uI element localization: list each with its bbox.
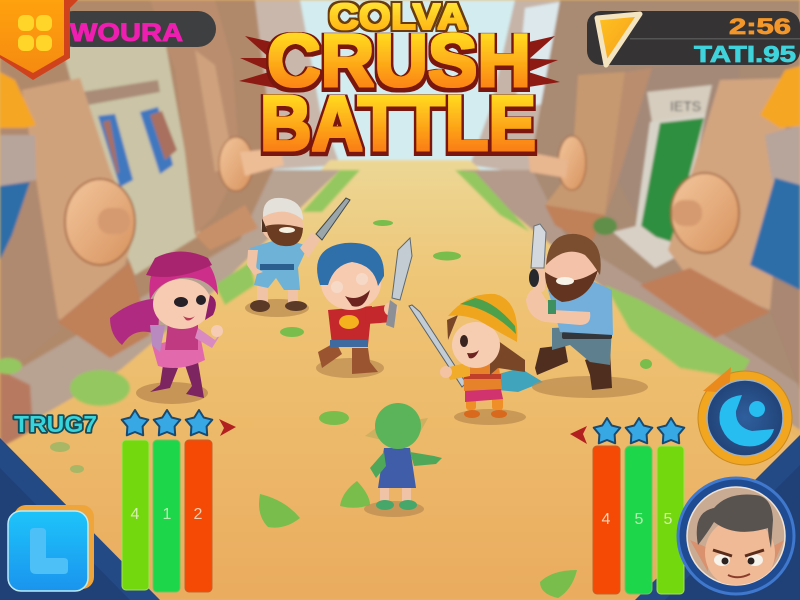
bar 5	[657, 446, 684, 594]
spikes	[239, 36, 560, 88]
bar 5: 5	[635, 511, 644, 528]
right pavement	[460, 170, 800, 430]
character: bearded man with turban	[245, 198, 350, 317]
timer and score panel	[587, 11, 800, 67]
bar 5: 5	[664, 511, 673, 528]
right arrow	[570, 426, 587, 444]
blue corner panel left	[0, 438, 160, 600]
character: girl with yellow hat and sword	[409, 294, 543, 425]
sky	[190, 0, 610, 170]
menu badge shield	[0, 0, 78, 80]
title logo	[239, 0, 560, 167]
left pavement	[0, 170, 340, 440]
distant towers	[230, 0, 570, 175]
timer and score panel: TATI.95	[694, 41, 796, 67]
door frame and sign	[613, 85, 712, 268]
right building wall	[530, 0, 800, 385]
orange triangle marker	[597, 14, 640, 65]
left bars	[122, 440, 212, 592]
bar 4	[593, 446, 620, 594]
player name pill: WOURA	[70, 19, 183, 47]
door frame and sign: IETS	[670, 98, 701, 114]
bar 1: 1	[163, 506, 172, 523]
left arrow	[219, 419, 236, 436]
right stars	[594, 418, 684, 443]
player avatar	[678, 478, 794, 594]
scattered leaves	[50, 220, 652, 598]
bar 2	[185, 440, 212, 592]
right shields	[528, 136, 739, 253]
character: green goblin seen from behind	[364, 403, 442, 517]
character: blue-haired boy with sword	[316, 238, 412, 378]
timer and score panel: 2:56	[729, 14, 791, 39]
left building wall	[0, 0, 275, 380]
left pillars	[150, 0, 240, 235]
player name pill	[55, 11, 216, 47]
L button	[8, 505, 94, 591]
blue corner panel right	[635, 435, 800, 600]
sand road	[0, 160, 800, 600]
bar 4	[122, 440, 149, 590]
bar 4: 4	[131, 506, 140, 523]
character: pink-haired girl	[110, 252, 223, 404]
bar 1	[153, 440, 180, 592]
character: big bearded man with sword	[526, 224, 648, 398]
left team name: TRUG7	[14, 411, 97, 437]
bar 2: 2	[194, 506, 203, 523]
left shields	[65, 137, 284, 265]
bar 5	[625, 446, 652, 594]
left yellow banner tab	[0, 72, 36, 128]
bar 4: 4	[602, 511, 611, 528]
moon action button	[698, 367, 792, 465]
left stars	[122, 410, 212, 435]
left windows	[98, 107, 177, 187]
grass	[0, 170, 750, 406]
right bars	[593, 446, 684, 594]
title line: CRUSH: CRUSH	[267, 19, 531, 102]
right pillars	[545, 72, 625, 215]
title line: BATTLE: BATTLE	[260, 79, 536, 167]
